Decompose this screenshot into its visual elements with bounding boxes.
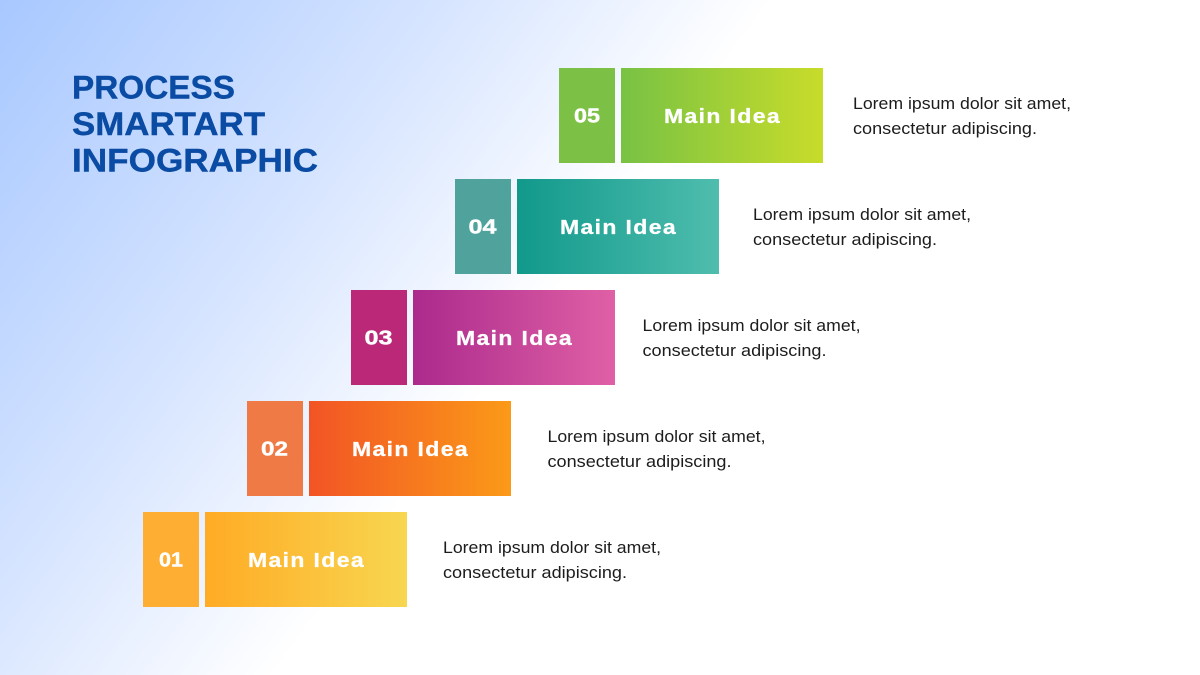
description 01 — [443, 539, 661, 582]
description 02 — [548, 428, 766, 471]
number block 05: 05 — [574, 106, 600, 128]
main idea bar 02 — [309, 401, 511, 496]
number block 02 — [247, 401, 303, 496]
description 04: Lorem ipsum dolor sit amet, — [753, 206, 971, 224]
main idea bar 01 — [205, 512, 407, 607]
description 01: Lorem ipsum dolor sit amet, — [443, 539, 661, 557]
number block 02: 02 — [261, 438, 288, 460]
step 04 — [455, 179, 971, 274]
step 02 — [247, 401, 766, 496]
step 01 — [143, 512, 661, 607]
number block 04: 04 — [468, 216, 498, 238]
description 04 — [753, 206, 971, 249]
number block 05 — [559, 68, 615, 163]
number block 01 — [143, 512, 199, 607]
number block 04 — [455, 179, 511, 274]
description 05: Lorem ipsum dolor sit amet, — [853, 95, 1071, 113]
description 04: consectetur adipiscing. — [753, 231, 937, 249]
main idea bar 05 — [621, 68, 823, 163]
title: SMARTART — [72, 106, 265, 142]
title: INFOGRAPHIC — [72, 142, 318, 178]
step 05 — [559, 68, 1071, 163]
description 03: Lorem ipsum dolor sit amet, — [642, 317, 860, 335]
description 05: consectetur adipiscing. — [853, 120, 1037, 138]
description 03 — [642, 317, 860, 360]
step 03 — [351, 290, 860, 385]
number block 03: 03 — [364, 328, 392, 350]
title: PROCESS — [72, 70, 235, 106]
description 01: consectetur adipiscing. — [443, 564, 627, 582]
main idea bar 03: Main Idea — [456, 328, 573, 350]
title — [72, 70, 318, 178]
description 02: consectetur adipiscing. — [548, 453, 732, 471]
main idea bar 04 — [517, 179, 719, 274]
main idea bar 04: Main Idea — [560, 217, 677, 239]
number block 03 — [351, 290, 407, 385]
main idea bar 01: Main Idea — [248, 550, 365, 572]
description 02: Lorem ipsum dolor sit amet, — [548, 428, 766, 446]
main idea bar 05: Main Idea — [664, 106, 781, 128]
main idea bar 02: Main Idea — [352, 439, 469, 461]
description 03: consectetur adipiscing. — [642, 342, 826, 360]
description 05 — [853, 95, 1071, 138]
main idea bar 03 — [413, 290, 615, 385]
number block 01: 01 — [159, 550, 183, 572]
